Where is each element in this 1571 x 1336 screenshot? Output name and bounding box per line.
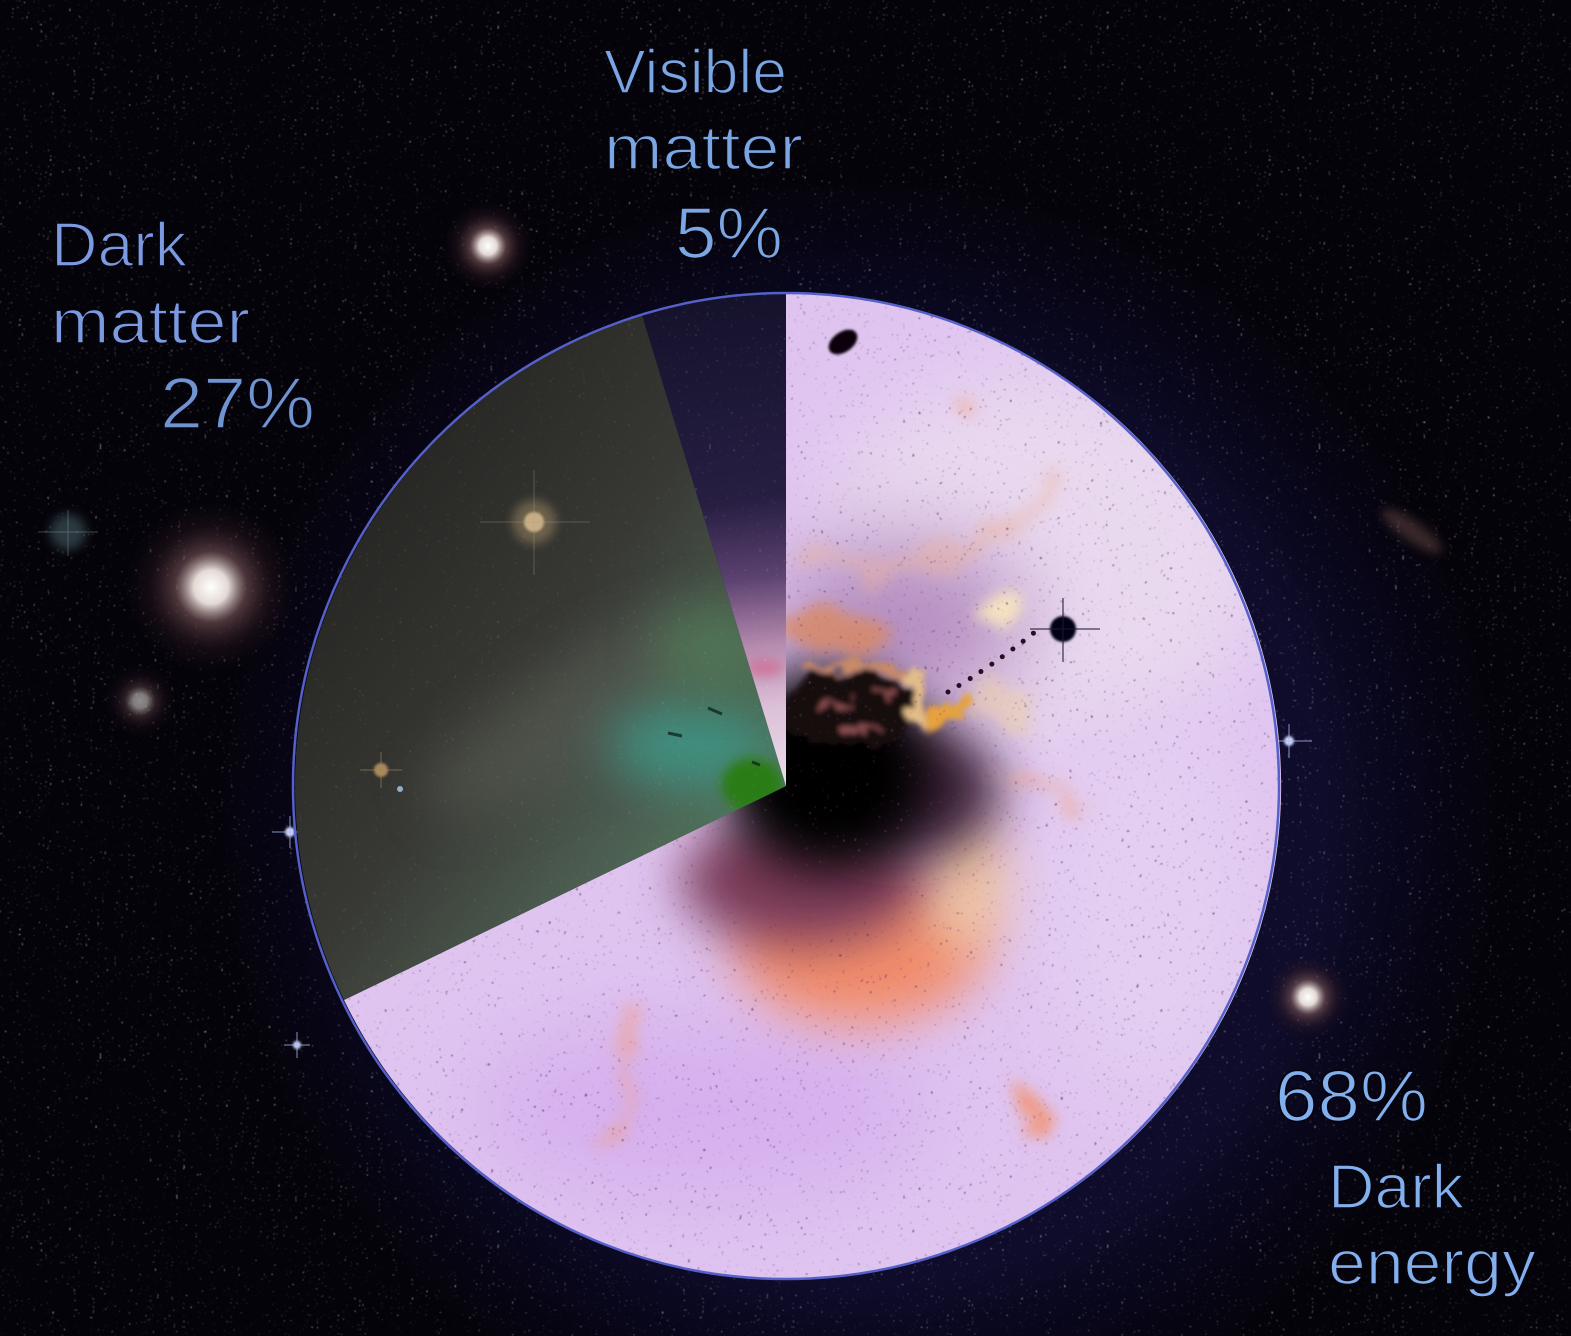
label: dark matter 27% — [51, 211, 315, 444]
label: visible matter 5%: 5% — [675, 194, 783, 274]
label: dark matter 27%: matter — [51, 288, 250, 357]
label: dark energy 68% — [1275, 1057, 1536, 1298]
slice: dark matter 27% — [295, 316, 786, 1000]
pie outline — [293, 293, 1279, 1279]
label: visible matter 5%: Visible — [604, 38, 787, 107]
slice: visible matter 5% — [642, 294, 786, 786]
label: dark matter 27%: 27% — [160, 364, 315, 444]
background galaxies and bright stars — [38, 202, 1447, 1058]
nebula core — [782, 665, 972, 748]
star chain — [948, 628, 1040, 692]
label: dark energy 68%: 68% — [1275, 1057, 1428, 1137]
label: dark energy 68%: Dark — [1328, 1153, 1465, 1222]
label: visible matter 5% — [604, 38, 803, 274]
label: dark matter 27%: Dark — [51, 211, 188, 280]
icon: black galaxy — [826, 328, 860, 356]
pie chart — [280, 280, 1290, 1290]
label: visible matter 5%: matter — [604, 114, 803, 183]
label: dark energy 68%: energy — [1328, 1229, 1536, 1298]
nebula filaments — [600, 395, 1095, 1150]
icon: inverted star — [1030, 598, 1100, 662]
slice: dark energy 68% — [280, 280, 1290, 1290]
